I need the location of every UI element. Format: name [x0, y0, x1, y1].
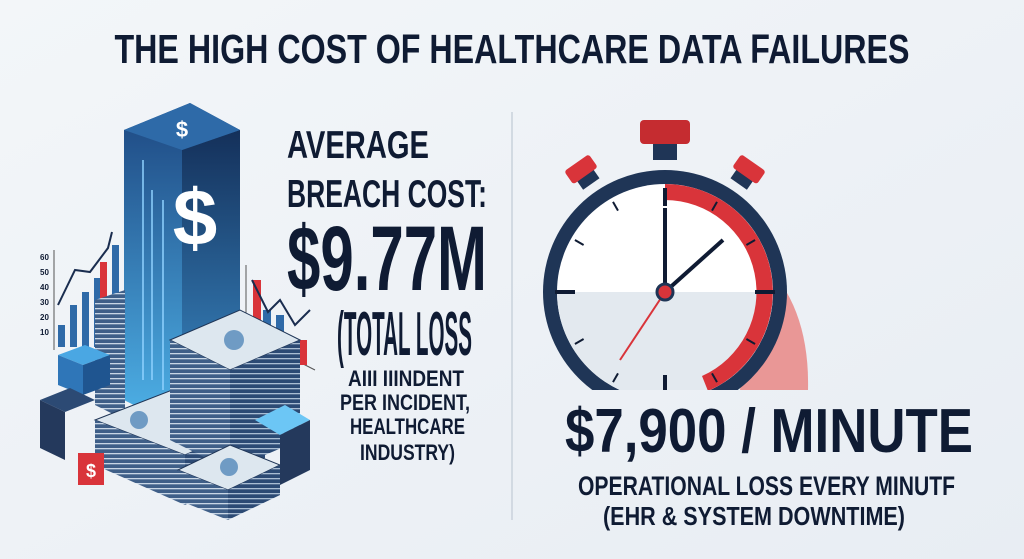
tower: [124, 103, 240, 430]
text block: average breach cost: PER INCIDENT,: [340, 390, 470, 415]
left bar chart: 50: [40, 268, 49, 277]
left bar chart: [40, 232, 119, 350]
left bar chart: 60: [40, 253, 49, 262]
text block: average breach cost: AVERAGE: [287, 124, 429, 167]
text block: average breach cost: BREACH COST:: [287, 173, 487, 216]
red tag: [78, 453, 104, 485]
text block: average breach cost: $9.77M: [287, 208, 487, 310]
left bar chart: 40: [40, 283, 49, 292]
left bar chart: 10: [40, 328, 49, 337]
illustration: money tower and charts: $: [176, 117, 188, 142]
text block: average breach cost: INDUSTRY): [360, 440, 455, 465]
icon: stopwatch: [543, 120, 808, 414]
text block: downtime cost: (EHR & SYSTEM DOWNTIME): [603, 501, 905, 531]
text block: average breach cost: HEALTHCARE: [350, 414, 465, 439]
right chart: [246, 265, 315, 370]
server blocks: [58, 345, 110, 365]
left bar chart: 30: [40, 298, 49, 307]
text block: downtime cost: [565, 397, 973, 531]
money stacks: [95, 290, 125, 420]
left bar chart: 20: [40, 313, 49, 322]
illustration: money tower and charts: $: [86, 461, 96, 481]
text block: average breach cost: AIII IIINDENT: [348, 366, 464, 391]
text: (TOTAL LOSS: [337, 300, 472, 369]
text block: average breach cost: [287, 124, 487, 465]
illustration: money tower and charts: $: [173, 173, 217, 262]
illustration: money tower and charts: [40, 103, 315, 520]
